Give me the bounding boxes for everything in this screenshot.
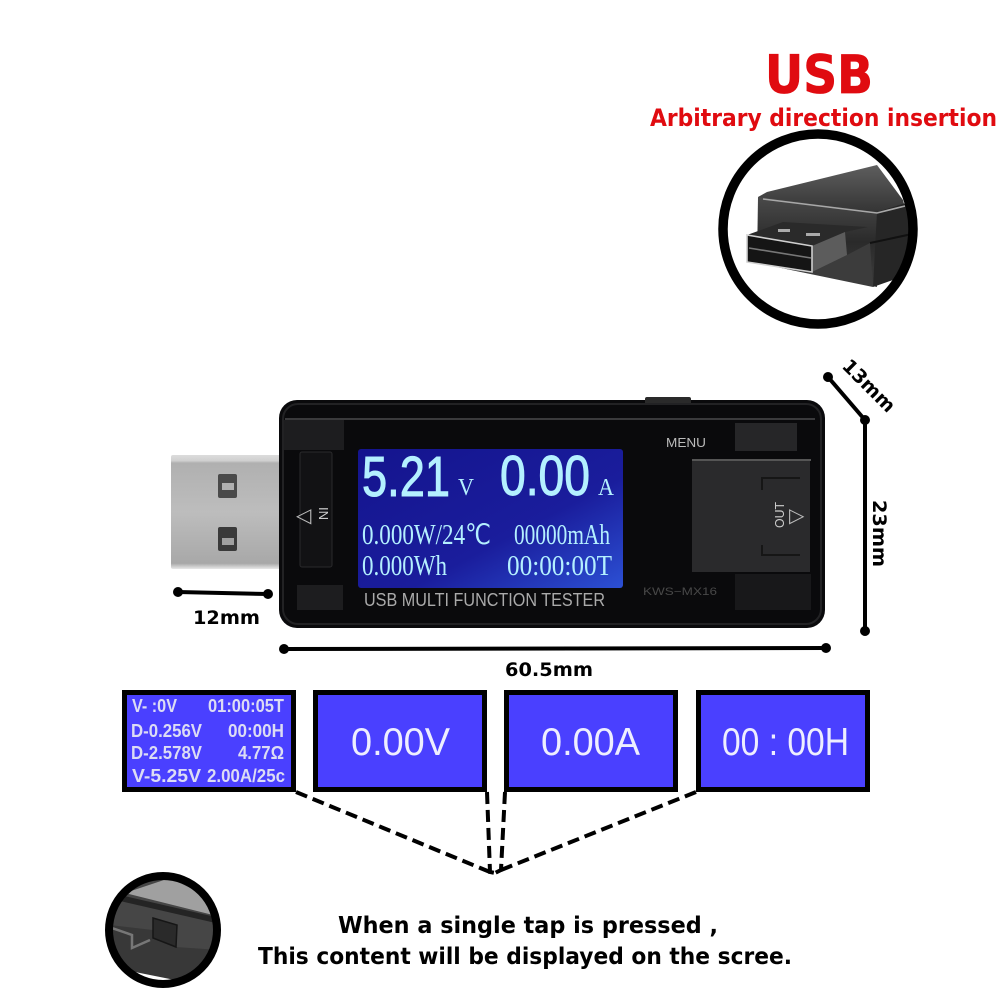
dimension: 23mm [860, 415, 890, 636]
LCD screen: A [598, 475, 615, 501]
device labels: MENU [666, 435, 706, 450]
LCD screen [358, 444, 623, 588]
device labels: KWS−MX16 [643, 586, 717, 598]
USB plug [171, 455, 281, 569]
device labels: ▷ [789, 505, 805, 527]
LCD screen: V [458, 475, 475, 501]
dimension: 23mm: 23mm [868, 500, 890, 567]
dimension: 13mm: 13mm [837, 355, 900, 417]
caption: When a single tap is pressed , [338, 913, 718, 939]
screen panel: data overview: 2.00A/25c [207, 766, 285, 786]
dimension: 12mm: 12mm [193, 607, 260, 629]
LCD screen: 0.000Wh [362, 551, 447, 582]
dimension: 60.5mm [279, 643, 831, 681]
screen panel: data overview: 4.77Ω [238, 743, 284, 763]
caption [258, 913, 792, 970]
device labels: ◁ [296, 505, 312, 527]
LCD screen: 0.00 [500, 444, 590, 508]
screen panel: time [698, 692, 868, 790]
caption: This content will be displayed on the scree. [258, 944, 792, 970]
LCD screen: 0.000W/24℃ [362, 520, 491, 551]
device labels: IN [316, 507, 331, 520]
device labels [296, 435, 805, 610]
screen panel: data overview: V- :0V [132, 696, 177, 716]
screen panel: current [506, 692, 676, 790]
dimension: 60.5mm: 60.5mm [505, 659, 593, 681]
screen panel: data overview: 01:00:05T [208, 696, 284, 716]
screen panel: voltage: 0.00V [351, 721, 450, 764]
screen panel: data overview [124, 692, 294, 790]
device labels: USB MULTI FUNCTION TESTER [364, 590, 605, 610]
dimension: 12mm [173, 587, 273, 629]
LCD screen: 00:00:00T [507, 551, 612, 582]
screen panel: data overview: D-0.256V [131, 721, 202, 741]
screen panel: current: 0.00A [541, 721, 640, 764]
device: USB multi function tester [171, 397, 825, 628]
screen panel: data overview: D-2.578V [131, 743, 202, 763]
device body [279, 400, 825, 628]
LCD screen: 5.21 [362, 445, 450, 509]
heading: USB: USB [765, 45, 873, 106]
dashed connectors [296, 792, 696, 873]
screen panel: data overview: V-5.25V [132, 766, 201, 786]
LCD screen: 00000mAh [514, 520, 610, 551]
icon: circular close-up of menu button [105, 872, 221, 988]
icon: circular close-up of USB plug [723, 134, 915, 324]
device labels: OUT [772, 502, 787, 528]
screen panel: voltage [316, 692, 484, 790]
screen panel: data overview: 00:00H [228, 721, 284, 741]
screen panel: time: 00 : 00H [722, 721, 849, 764]
